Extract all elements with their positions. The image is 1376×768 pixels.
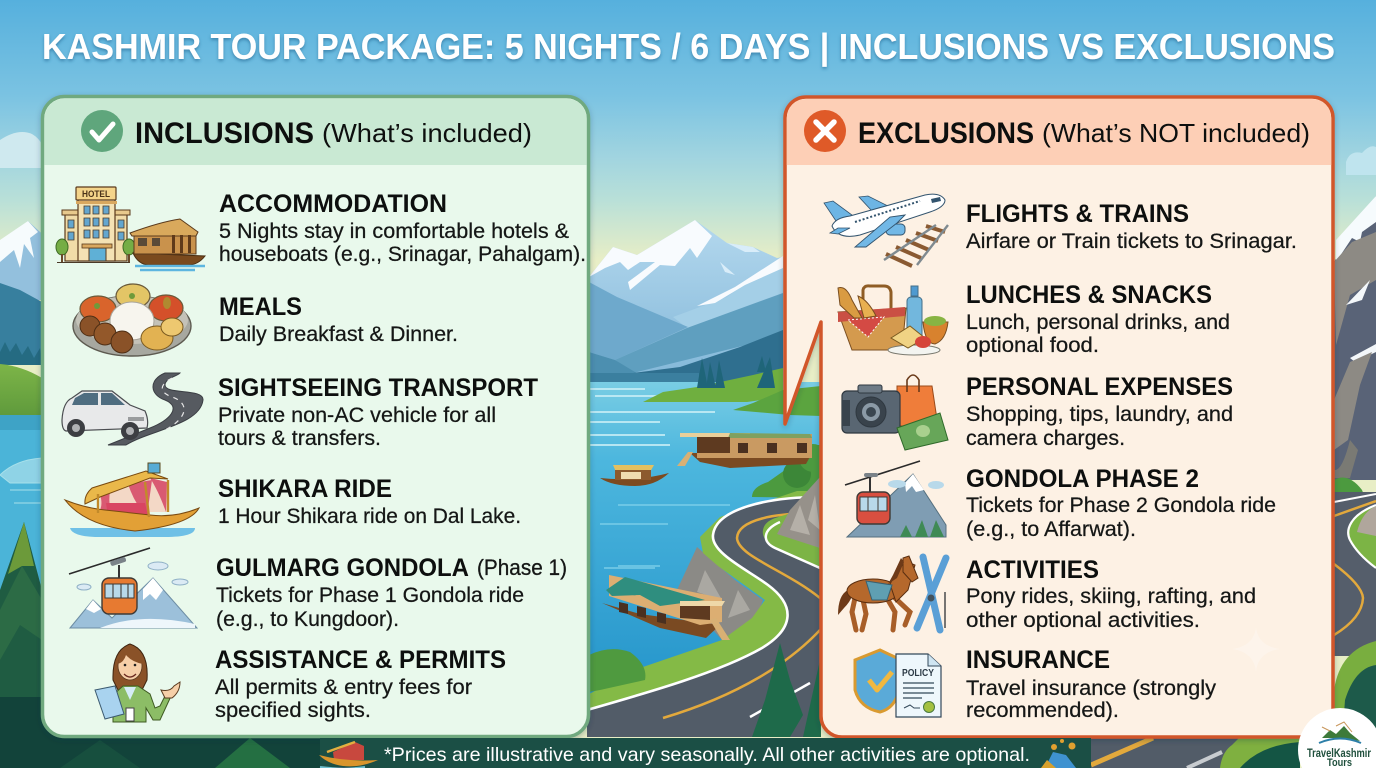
item: personal expenses [842,373,1233,450]
icon: shield and policy document [855,650,941,717]
item: assistance and permits [95,644,506,722]
item: accommodation: ACCOMMODATION [219,190,447,218]
item: gulmarg gondola: GULMARG GONDOLA [216,554,469,582]
item: lunches and snacks: LUNCHES & SNACKS [966,281,1212,309]
left strip scene [0,221,60,300]
icon: picnic basket [838,286,948,355]
icon: shield and policy document: POLICY [902,668,934,679]
houseboat on lake [690,453,812,468]
panel: inclusions [42,96,588,736]
logo badge [1298,708,1376,768]
item: sightseeing transport [62,373,538,450]
item: activities: ACTIVITIES [966,556,1099,584]
item: lunches and snacks: optional food. [966,334,1099,357]
panel: exclusions [785,97,1333,737]
small shikara on lake [600,473,669,486]
lake [589,382,821,727]
item: shikara ride [65,463,521,537]
icon: check mark [81,110,123,152]
exclusions heading: EXCLUSIONS [858,117,1034,150]
icon: shikara boat [65,463,199,537]
item: gondola phase 2: GONDOLA PHASE 2 [966,465,1199,493]
centre far mountains [589,220,790,400]
houseboat near road [602,603,720,638]
item: gondola phase 2: Tickets for Phase 2 Gondola ride [966,494,1276,517]
item: sightseeing transport: tours & transfers. [218,427,381,450]
icon: plane and rail track [824,194,948,266]
item: lunches and snacks: Lunch, personal drinks, and [966,311,1230,334]
icon: gondola over snow mountains [69,548,197,628]
rock on shore [677,547,763,640]
item: insurance: recommended). [966,699,1119,722]
item: meals: MEALS [219,293,302,321]
item: activities: other optional activities. [966,609,1200,632]
item: assistance and permits: ASSISTANCE & PERMITS [215,646,506,674]
road [589,491,821,737]
lower bush [589,649,645,692]
item: accommodation [56,187,586,270]
icon: car on winding road [62,373,203,445]
title: KASHMIR TOUR PACKAGE: 5 NIGHTS / 6 DAYS | INCLUSIONS VS EXCLUSIONS [42,26,1335,68]
icon: camera, shopping bag and cash [842,375,948,450]
icon: red gondola and mountain [845,461,946,537]
icon: tour guide with tablet [95,644,180,722]
item: sightseeing transport: Private non-AC vehicle for all [218,404,496,427]
item: personal expenses: PERSONAL EXPENSES [966,373,1233,401]
footer note band: *Prices are illustrative and vary seasonally. All other activities are optional. [384,744,1030,766]
green spit [643,368,783,402]
item: accommodation: houseboats (e.g., Srinagar, Pahalgam). [219,243,586,266]
item: assistance and permits: All permits & entry fees for [215,676,472,699]
item: gondola phase 2: (e.g., to Affarwat). [966,518,1136,541]
item: gulmarg gondola: Tickets for Phase 1 Gondola ride [216,584,524,607]
item: gulmarg gondola: (e.g., to Kungdoor). [216,608,399,631]
icon: small map and pins [1041,739,1076,768]
road at lower right [1090,737,1300,768]
item: personal expenses: Shopping, tips, laundry, and [966,403,1233,426]
item: sightseeing transport: SIGHTSEEING TRANSPORT [218,374,538,402]
item: meals [73,284,458,356]
item: insurance [855,646,1217,722]
item: assistance and permits: specified sights. [215,699,371,722]
right strip scene [1334,196,1376,480]
icon: pony and skis [838,556,946,630]
item: shikara ride: 1 Hour Shikara ride on Dal Lake. [218,505,521,528]
item: insurance: INSURANCE [966,646,1110,674]
footer note band [319,738,1091,768]
inclusions heading: INCLUSIONS [135,117,314,150]
item: flights and trains [824,194,1297,266]
item: insurance: Travel insurance (strongly [966,677,1217,700]
item: personal expenses: camera charges. [966,427,1125,450]
icon: small shikara [319,742,378,768]
icon: thali plate [73,284,191,356]
icon: cross mark [804,110,846,152]
item: gulmarg gondola: (Phase 1) [477,555,567,580]
icon: hotel and houseboat: HOTEL [82,189,110,200]
item: accommodation: 5 Nights stay in comfortable hotels & [219,220,569,243]
icon: hotel and houseboat [56,187,205,270]
bushes by lake [752,445,821,498]
item: activities: Pony rides, skiing, rafting, and [966,585,1256,608]
inclusions heading: (What’s included) [322,118,532,148]
item: meals: Daily Breakfast & Dinner. [219,323,458,346]
item: shikara ride: SHIKARA RIDE [218,475,392,503]
item: flights and trains: Airfare or Train tickets to Srinagar. [966,230,1297,253]
item: gondola phase 2 [845,461,1276,541]
item: activities [838,556,1256,632]
item: lunches and snacks [838,281,1230,357]
inclusions heading [81,110,532,152]
exclusions heading: (What’s NOT included) [1042,118,1310,148]
bottom pines [752,643,821,737]
exclusions heading [804,110,1310,152]
item: flights and trains: FLIGHTS & TRAINS [966,200,1189,228]
item: gulmarg gondola [69,548,567,631]
